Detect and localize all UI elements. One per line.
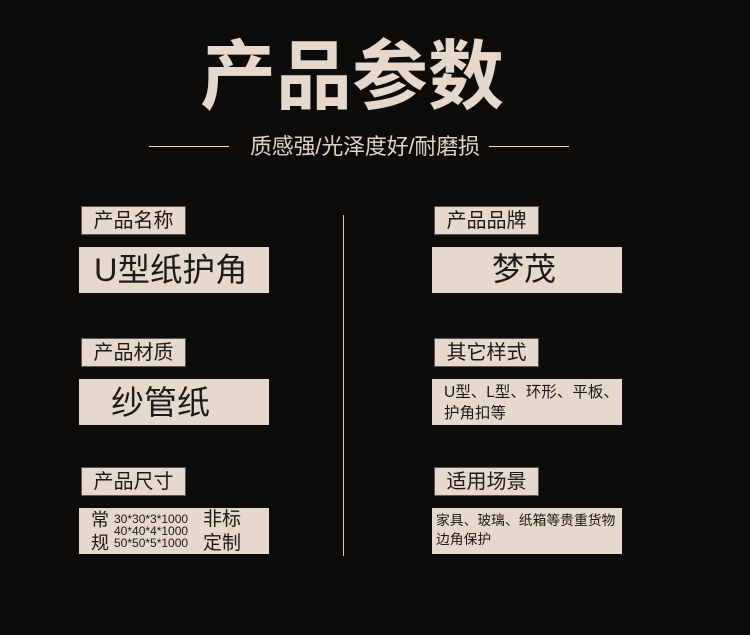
value: product name: U型纸护角: [94, 252, 247, 288]
panel: material: [79, 338, 269, 425]
panel: product name: [79, 206, 269, 293]
text: dimensions: 40*40*4*1000: [114, 524, 188, 538]
label: material: [81, 338, 186, 367]
label: product name: [81, 206, 186, 235]
label: material: 产品材质: [94, 342, 174, 364]
value: other styles: U型、L型、环形、平板、: [444, 384, 619, 401]
value: material: [79, 379, 269, 425]
label: brand: 产品品牌: [446, 210, 526, 232]
text: dimensions: [114, 512, 188, 550]
title: 产品参数: [200, 35, 504, 120]
label: size: [81, 467, 186, 496]
value: size: [79, 508, 269, 554]
text: regular: [91, 510, 109, 553]
label: product name: 产品名称: [94, 210, 174, 232]
label: size: 产品尺寸: [94, 471, 174, 493]
panel: other styles: [432, 338, 622, 425]
value: scenarios: 家具、玻璃、纸箱等贵重货物: [436, 513, 615, 528]
text: custom: [203, 509, 241, 554]
value: scenarios: 边角保护: [436, 532, 491, 547]
text: dimensions: 50*50*5*1000: [114, 536, 188, 550]
value: brand: [432, 247, 622, 293]
value: product name: [79, 247, 269, 293]
value: brand: 梦茂: [492, 251, 556, 287]
label: scenarios: 适用场景: [446, 471, 526, 493]
subtitle: 质感强/光泽度好/耐磨损: [250, 134, 480, 159]
text: regular: 常: [91, 510, 109, 530]
panel: brand: [432, 206, 622, 293]
text: regular: 规: [91, 533, 109, 553]
text: custom: 非标: [203, 509, 241, 530]
panel: scenarios: [432, 467, 622, 554]
label: brand: [434, 206, 539, 235]
value: scenarios: [432, 508, 622, 554]
value: other styles: 护角扣等: [444, 405, 506, 422]
text: dimensions: 30*30*3*1000: [114, 512, 188, 526]
value: other styles: [432, 379, 622, 425]
label: scenarios: [434, 467, 539, 496]
panel: size: [79, 467, 269, 554]
text: custom: 定制: [203, 533, 241, 554]
value: material: 纱管纸: [111, 384, 210, 421]
label: other styles: 其它样式: [446, 342, 526, 364]
label: other styles: [434, 338, 539, 367]
